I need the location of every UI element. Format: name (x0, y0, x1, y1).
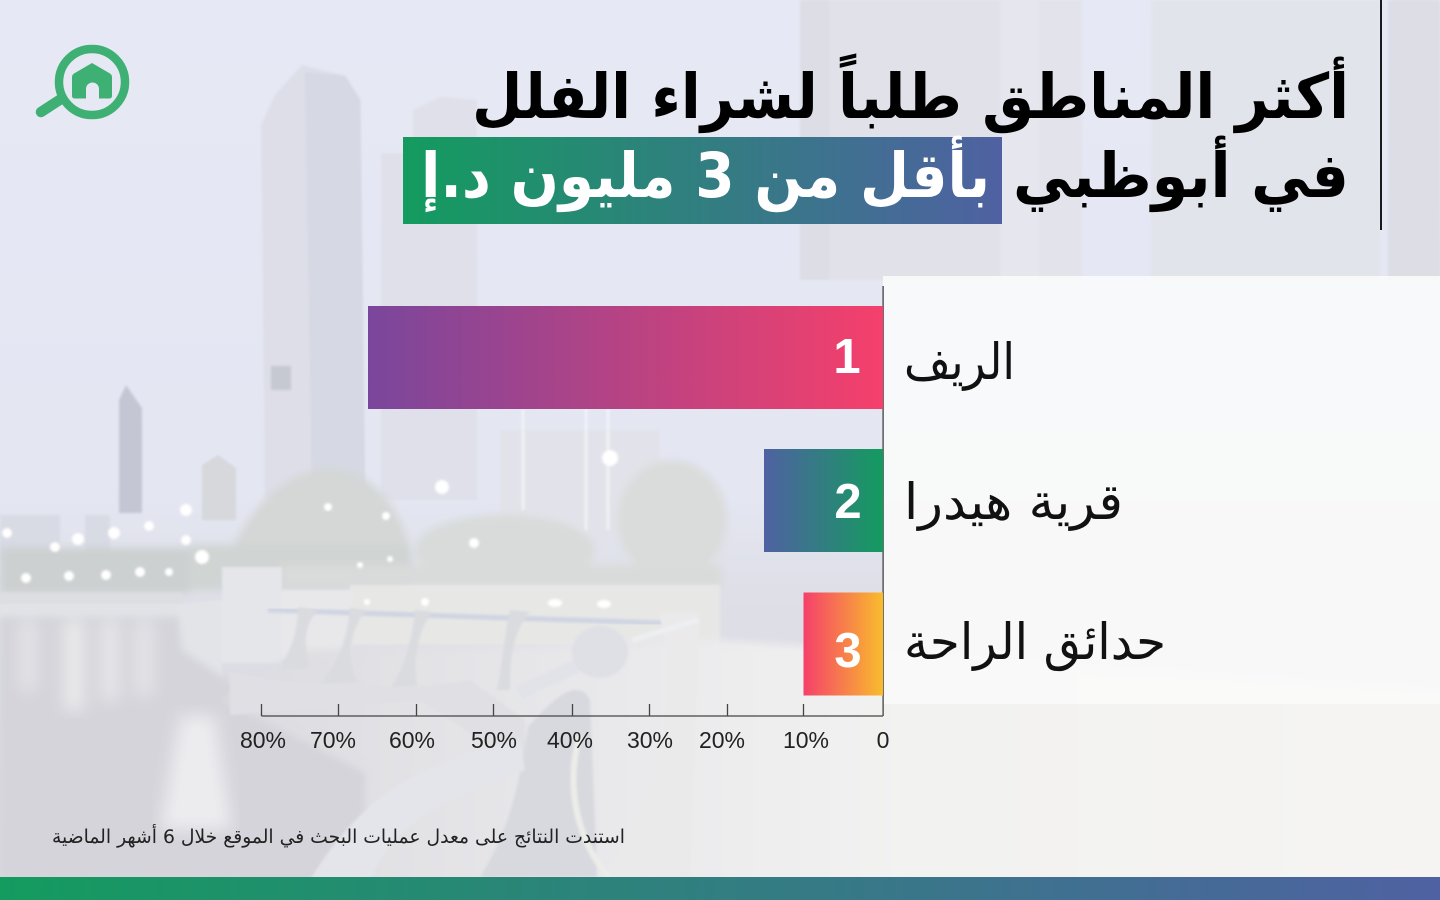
x axis labels: 20% (699, 727, 745, 753)
bar 2: 2 (834, 475, 862, 529)
left tower (261, 65, 365, 500)
title line 2: في أبوظبي (1013, 135, 1349, 212)
label: Al Reef: الريف (904, 333, 1015, 391)
water reflections (22, 620, 152, 710)
chart vertical axis (882, 286, 884, 716)
x axis labels (240, 727, 889, 753)
x axis (240, 704, 889, 753)
promenade walls (0, 567, 720, 720)
x axis labels: 0 (877, 727, 889, 753)
x axis labels: 50% (471, 727, 517, 753)
x axis labels: 80% (240, 727, 286, 753)
x axis labels: 30% (627, 727, 673, 753)
sparkle on the water (160, 716, 232, 830)
bar 1: 1 (833, 330, 861, 384)
title vertical rule (1380, 0, 1382, 230)
bench foreground (230, 620, 698, 880)
bench rail (268, 610, 661, 623)
x axis labels: 40% (547, 727, 593, 753)
label: Hydra Village: قرية هيدرا (904, 473, 1123, 531)
x axis labels: 10% (783, 727, 829, 753)
bar 1 (368, 306, 883, 409)
promenade ground (222, 640, 1440, 890)
bar 3: 3 (834, 624, 862, 678)
title (403, 52, 1349, 224)
middle towers (381, 97, 477, 500)
title line 1: أكثر المناطق طلباً لشراء الفلل (472, 52, 1349, 133)
distant skyline (0, 515, 60, 560)
white panel behind area labels (883, 276, 1440, 704)
right-side towers (800, 0, 1440, 280)
bar 2 (764, 449, 883, 552)
water (0, 617, 367, 880)
bottom gradient bar (0, 877, 1440, 900)
footnote: استندت النتائج على معدل عمليات البحث في الموقع خلال 6 أشهر الماضية (52, 824, 625, 848)
label: Al Raha Gardens: حدائق الراحة (904, 613, 1166, 671)
x axis labels: 60% (389, 727, 435, 753)
x axis labels: 70% (310, 727, 356, 753)
title highlighted text: بأقل من 3 مليون د.إ (421, 135, 990, 212)
bench supports (278, 607, 700, 880)
title highlight box (403, 137, 1002, 224)
bar 3 (804, 592, 883, 696)
bar chart (240, 286, 1166, 753)
street lamps (2, 400, 618, 608)
logo: magnifier with house (41, 49, 125, 115)
treeline (0, 460, 727, 593)
